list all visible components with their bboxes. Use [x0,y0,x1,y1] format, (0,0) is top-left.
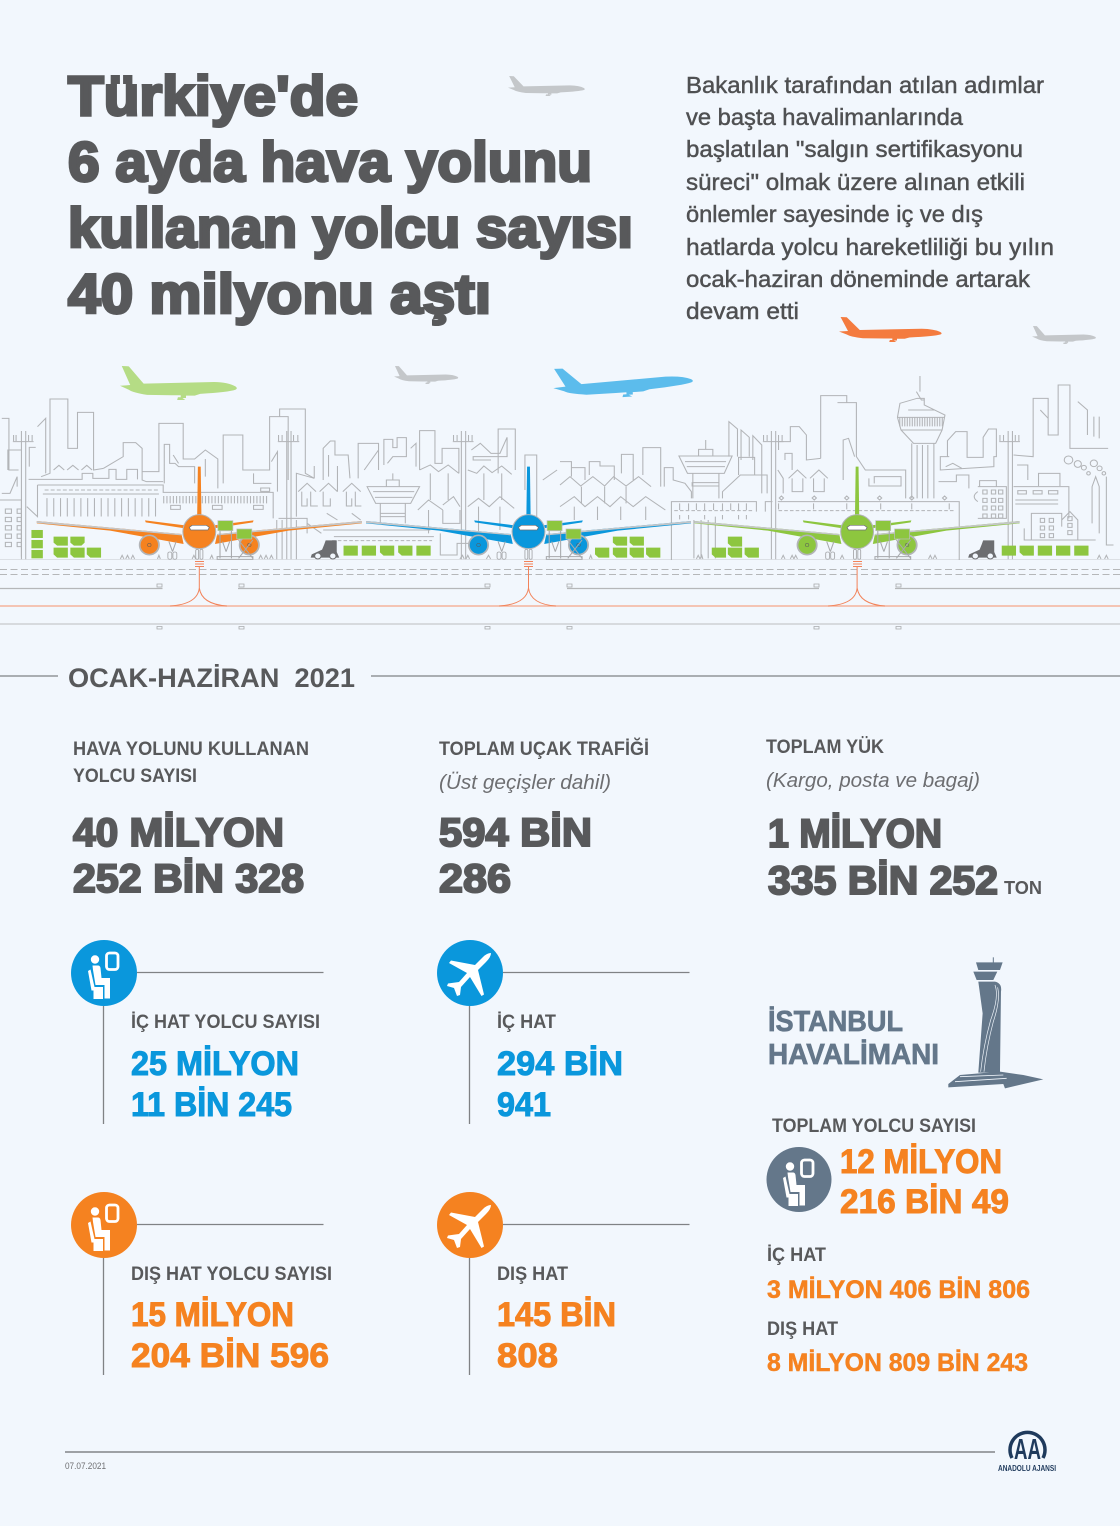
intro text block: önlemler sayesinde iç ve dış [686,201,983,227]
stat: Istanbul domestic: 3 MİLYON 406 BİN 806 [767,1276,1030,1304]
heading: Istanbul Airport: İSTANBUL [768,1006,903,1038]
intro text block [686,72,1054,324]
cargo boxes left [31,530,431,558]
intro text block: başlatılan "salgın sertifikasyonu [686,136,1023,162]
runway markings [0,562,1120,629]
stat: cargo total: TON [1004,878,1042,898]
stat: cargo total: 1 MİLYON [768,812,942,856]
stat: Istanbul domestic [767,1245,1030,1304]
intro text block: devam etti [686,298,799,324]
city skyline right [560,376,1120,560]
stat: cargo total: 335 BİN 252 [768,859,998,903]
intro text block: ocak-haziran döneminde artarak [686,266,1031,292]
section heading: OCAK-HAZİRAN 2021 [68,663,355,693]
intro text block: süreci" olmak üzere alınan etkili [686,169,1025,195]
stat: Istanbul international: 8 MİLYON 809 BİN 243 [767,1349,1028,1377]
title: 40 milyonu aştı [68,262,491,325]
stat: Istanbul domestic: İÇ HAT [767,1245,826,1266]
title: Türkiye'de [68,64,358,127]
icon: blue plane [552,359,694,402]
panel: domestic passengers: 11 BİN 245 [131,1086,292,1124]
date: 07.07.2021 [65,1461,106,1471]
icon: grey plane top [508,76,585,96]
icon: grey plane right [1032,326,1096,344]
orange front plane [37,467,362,559]
logo: Anadolu Ajansi [998,1432,1056,1473]
panel: Istanbul Airport total passengers: 12 MİLYON [840,1143,1002,1181]
icon: green plane [120,366,237,400]
intro text block: Bakanlık tarafından atılan adımlar [686,72,1044,98]
panel: international flights: 145 BİN [497,1296,616,1334]
stat: cargo total [766,737,1042,903]
panel: international passengers: 15 MİLYON [131,1296,294,1334]
stat: Istanbul international: DIŞ HAT [767,1319,838,1340]
icon: orange plane [839,317,942,342]
icon: tractor right [968,540,997,559]
heading: Istanbul Airport: HAVALİMANI [768,1039,939,1071]
panel: domestic flights: İÇ HAT [497,1012,556,1033]
stat: air traffic total [439,738,649,901]
stat: cargo total: (Kargo, posta ve bagaj) [766,770,980,792]
logo: Anadolu Ajansi: ANADOLU AJANSI [998,1464,1056,1473]
stat: passengers total: 40 MİLYON [73,811,284,855]
title [68,64,633,325]
intro text block: hatlarda yolcu hareketliliği bu yılın [686,234,1054,260]
panel: domestic passengers: İÇ HAT YOLCU SAYISI [131,1012,320,1033]
stat: passengers total: 252 BİN 328 [73,857,304,901]
panel: domestic flights: 294 BİN [497,1045,623,1083]
panel: Istanbul Airport total passengers: 216 BİN 49 [840,1183,1009,1221]
panel: domestic passengers: 25 MİLYON [131,1045,299,1083]
panel: international flights: DIŞ HAT [497,1264,568,1285]
stat: air traffic total: 286 [439,857,511,901]
city skyline left [0,399,560,559]
panel: international passengers: DIŞ HAT YOLCU SAYISI [131,1264,332,1285]
panel: domestic flights: 941 [497,1086,551,1124]
cargo boxes right [595,537,1089,558]
footer rule [65,1451,995,1453]
panel: international passengers: 204 BİN 596 [131,1337,329,1375]
stat: passengers total: HAVA YOLUNU KULLANAN [73,739,309,760]
stat: air traffic total: 594 BİN [439,811,592,855]
stat: passengers total [73,739,309,901]
intro text block: ve başta havalimanlarında [686,104,963,130]
panel: Istanbul Airport total passengers: TOPLAM YOLCU SAYISI [772,1116,976,1137]
icon: tractor left [311,540,339,559]
stat: passengers total: YOLCU SAYISI [73,766,197,787]
panel: international flights [437,1192,690,1375]
icon: airport tower [948,957,1043,1088]
blue front plane [366,467,691,559]
panel: international flights: 808 [497,1337,558,1375]
panel: domestic flights [437,940,690,1124]
stat: air traffic total: TOPLAM UÇAK TRAFİĞİ [439,738,649,760]
title: kullanan yolcu sayısı [68,196,633,259]
panel: international passengers [71,1192,332,1375]
panel: Istanbul Airport total passengers [766,1116,1009,1221]
heading: Istanbul Airport [768,1006,939,1071]
stat: cargo total: TOPLAM YÜK [766,737,884,758]
logo: Anadolu Ajansi: AA [1014,1434,1041,1466]
stat: Istanbul international [767,1319,1028,1377]
icon: grey plane middle [394,366,458,384]
green front plane [695,467,1020,559]
stat: air traffic total: (Üst geçişler dahil) [439,772,611,794]
title: 6 ayda hava yolunu [68,130,592,193]
panel: domestic passengers [71,940,324,1124]
